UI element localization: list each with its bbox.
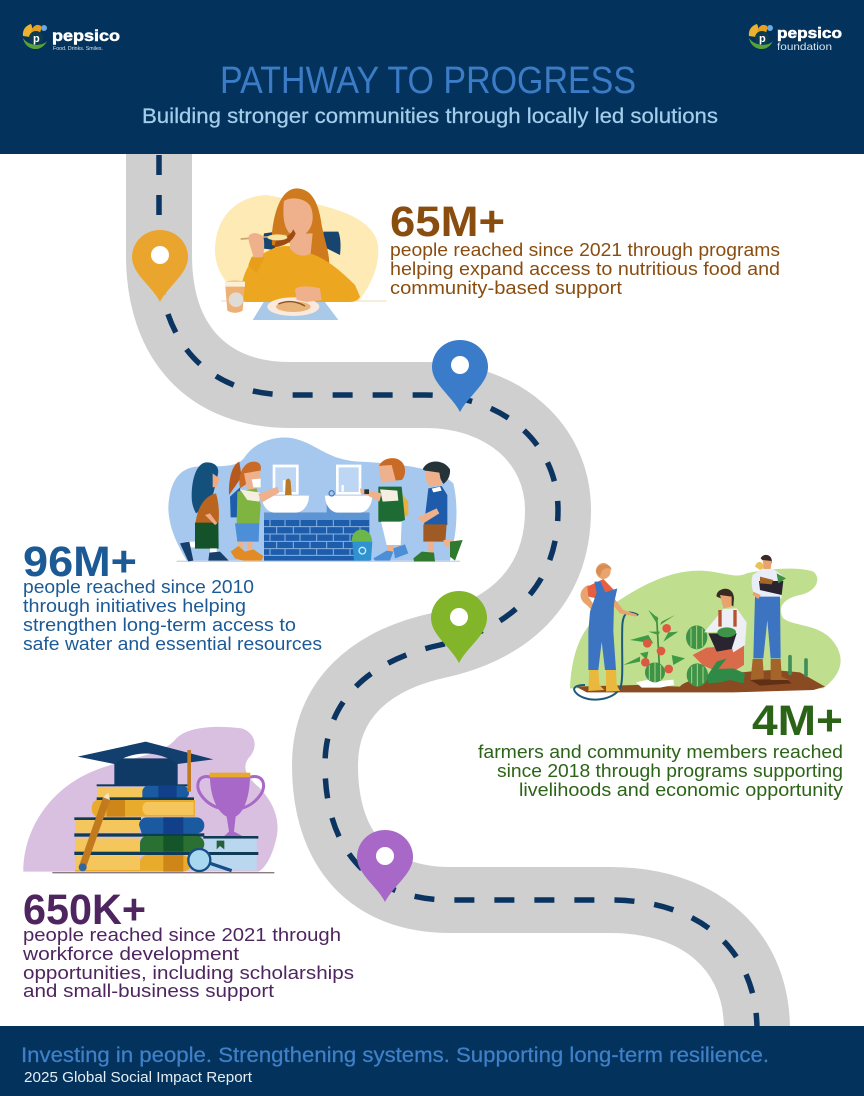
- stat: 65M+: 65M+: [390, 198, 505, 246]
- stat: 65M+: helping expand access to nutritious food and: [390, 258, 780, 279]
- brick wall: [264, 513, 369, 561]
- farmer with basket: [751, 555, 789, 680]
- kneeling farmer with watermelons: [686, 589, 747, 687]
- stat: 4M+: 4M+: [752, 697, 843, 745]
- logo: pepsico: Food. Drinks. Smiles.: [53, 46, 103, 52]
- illustration: farmers in a garden: [570, 555, 841, 700]
- subtitle: Building stronger communities through locally led solutions: [142, 104, 718, 128]
- stat: 65M+: community-based support: [390, 277, 622, 298]
- stat: 65M+: [390, 198, 780, 298]
- logo: pepsico: [23, 24, 120, 52]
- trophy: [198, 773, 264, 836]
- child 2: [229, 462, 279, 561]
- logo: pepsico foundation: p: [759, 33, 766, 45]
- child 1: [180, 462, 229, 561]
- illustration: children washing hands: [168, 437, 463, 561]
- illustration: woman eating: [215, 188, 387, 320]
- stat: 650K+: 650K+: [23, 886, 146, 934]
- right books: [203, 836, 258, 839]
- stat: 96M+: safe water and essential resources: [23, 633, 322, 654]
- tomato plant: [623, 610, 685, 682]
- stat: 650K+: and small-business support: [23, 980, 274, 1001]
- title: PATHWAY TO PROGRESS: [220, 60, 636, 102]
- footer panel: [0, 1026, 864, 1096]
- stat: 4M+: since 2018 through programs supporting: [497, 760, 843, 781]
- book 2: [92, 800, 195, 817]
- stat: 4M+: farmers and community members reached: [478, 741, 843, 762]
- mirrors and faucets: [274, 466, 360, 493]
- book 1: [97, 784, 189, 786]
- stat: 96M+: people reached since 2010: [23, 576, 254, 597]
- stat: 4M+: [478, 697, 844, 800]
- logo: pepsico foundation: [749, 24, 842, 53]
- winding road: [159, 150, 757, 1030]
- stat: 650K+: people reached since 2021 through: [23, 924, 341, 945]
- stat: 65M+: people reached since 2021 through programs: [390, 239, 780, 260]
- stat: 650K+: opportunities, including scholarships: [23, 962, 354, 983]
- stat: 4M+: livelihoods and economic opportunity: [519, 779, 844, 800]
- recycling bin: [352, 530, 372, 542]
- child 4: [413, 461, 463, 561]
- logo: pepsico foundation: pepsico: [777, 26, 842, 42]
- magnifying glass: [210, 863, 232, 871]
- pin: green: [431, 591, 487, 663]
- logo: pepsico foundation: foundation: [777, 41, 832, 53]
- graduation cap: [114, 758, 178, 786]
- stat: 96M+: 96M+: [23, 538, 137, 586]
- logo: pepsico: pepsico: [52, 28, 120, 45]
- pin: blue: [432, 340, 488, 412]
- stat: 650K+: workforce development: [22, 943, 239, 964]
- book 4: [74, 833, 204, 837]
- child 3: [360, 458, 408, 561]
- stat: 96M+: strengthen long-term access to: [23, 614, 296, 635]
- header panel: [0, 0, 864, 154]
- pencil: [79, 797, 110, 868]
- pin: purple: [357, 830, 413, 902]
- stat: 650K+: [22, 886, 354, 1001]
- illustration: books, cap and trophy: [23, 727, 278, 873]
- sinks: [262, 496, 372, 513]
- small cactus: [790, 657, 806, 675]
- logo: pepsico: p: [33, 33, 40, 45]
- book 3: [74, 817, 141, 820]
- footer report name: 2025 Global Social Impact Report: [24, 1070, 252, 1086]
- farmer with hose: [580, 563, 637, 692]
- hose: [574, 612, 638, 700]
- stat: 96M+: [23, 538, 322, 654]
- footer tagline: Investing in people. Strengthening systems. Supporting long-term resilience.: [21, 1043, 769, 1067]
- stat: 96M+: through initiatives helping: [23, 595, 246, 616]
- pin: orange: [132, 230, 188, 302]
- book 5: [74, 852, 204, 855]
